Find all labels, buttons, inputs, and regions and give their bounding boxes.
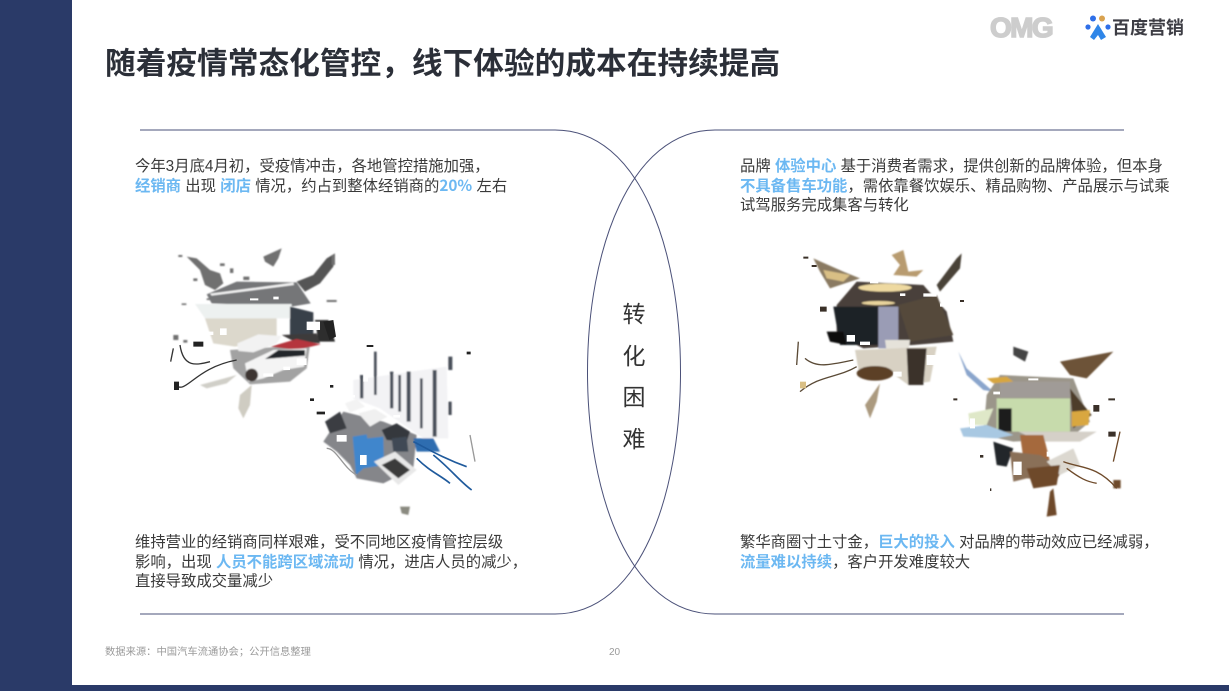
text: bottom left: 维持营业的经销商同样艰难，受不同地区疫情管控层级 [135, 534, 503, 551]
text: top left [135, 158, 507, 196]
center label: 困 [622, 384, 646, 410]
logo: OMG: OMG [990, 12, 1052, 43]
text: bottom right [740, 530, 1159, 572]
title: 随着疫情常态化管控，线下体验的成本在持续提高 [105, 46, 780, 81]
text: top left: 经销商 出现 闭店 情况，约占到整体经销商的20% 左右 [135, 174, 507, 196]
center label: 难 [622, 426, 646, 452]
logo: Baidu Marketing: 百度营销 [1112, 18, 1184, 38]
center label: 化 [622, 342, 646, 368]
side band [0, 0, 72, 691]
text: top right [740, 154, 1170, 214]
text: bottom left [135, 534, 527, 590]
text: top right: 试驾服务完成集客与转化 [740, 197, 909, 214]
center label: 转 [622, 301, 646, 327]
logo: Baidu Marketing [1085, 16, 1184, 40]
image: experience center splashes [796, 250, 1122, 518]
text: top right: 品牌 体验中心 基于消费者需求，提供创新的品牌体验，但本身 [740, 154, 1163, 176]
text: bottom left: 影响，出现 人员不能跨区域流动 情况，进店人员的减少， [135, 550, 527, 572]
image: dealership splashes [170, 248, 476, 516]
text: bottom left: 直接导致成交量减少 [135, 573, 273, 590]
text: top right: 不具备售车功能，需依靠餐饮娱乐、精品购物、产品展示与试乘 [740, 174, 1170, 196]
center label [622, 301, 646, 452]
text: top left: 今年3月底4月初，受疫情冲击，各地管控措施加强， [135, 158, 490, 175]
source note: 数据来源：中国汽车流通协会；公开信息整理 [105, 647, 311, 658]
text: bottom right: 繁华商圈寸土寸金，巨大的投入 对品牌的带动效应已经减弱， [740, 530, 1159, 552]
bottom band [72, 685, 1229, 691]
page number: 20 [609, 647, 620, 658]
text: bottom right: 流量难以持续，客户开发难度较大 [740, 550, 970, 572]
